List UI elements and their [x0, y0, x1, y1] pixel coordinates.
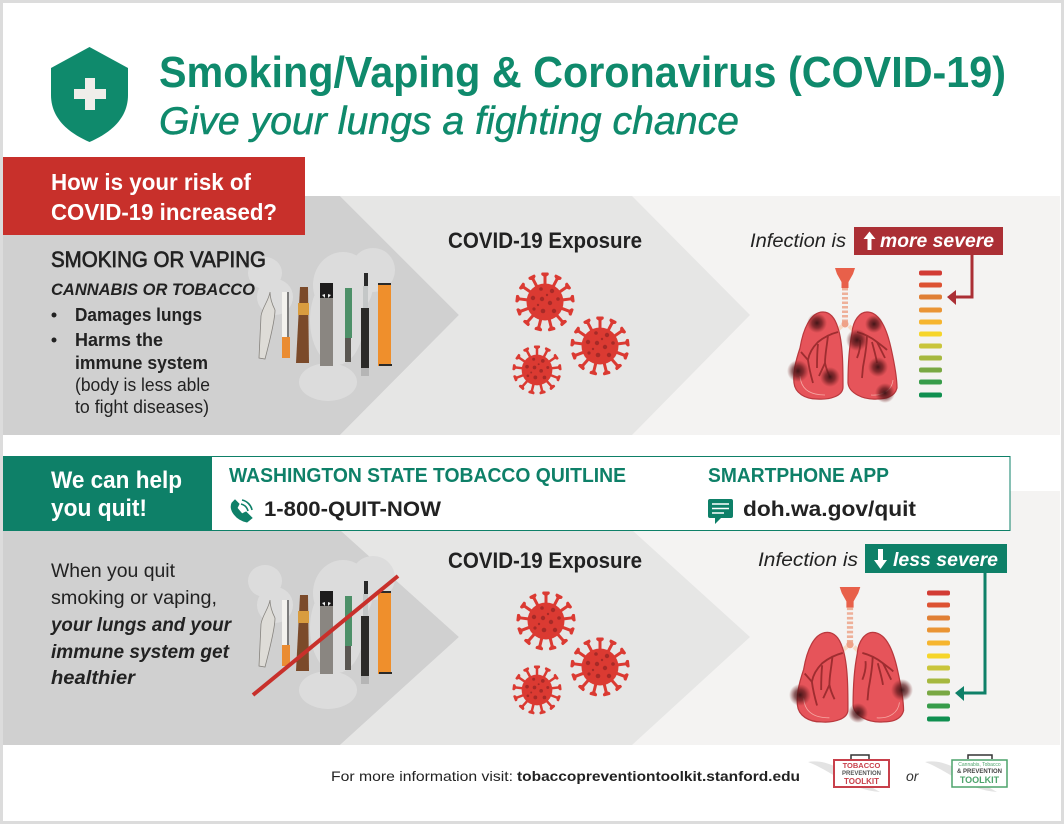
quit heading: you quit! — [51, 495, 147, 522]
exposure heading: COVID-19 Exposure — [448, 228, 642, 253]
risk heading: COVID-19 increased? — [51, 199, 277, 225]
icon: healthier lungs — [789, 587, 913, 723]
icon: damaged lungs — [787, 268, 897, 403]
app url: doh.wa.gov/quit — [743, 498, 916, 521]
icon: virus particles — [512, 592, 630, 715]
icon: chat bubble — [708, 499, 733, 524]
risk heading — [3, 157, 305, 235]
app heading: SMARTPHONE APP — [708, 465, 889, 487]
quit text block: smoking or vaping, — [51, 588, 217, 609]
severity scale — [919, 270, 942, 398]
or label: or — [906, 768, 920, 784]
infection label: less severe — [893, 550, 998, 571]
icon: phone — [231, 500, 252, 522]
smoking text block: Damages lungs — [75, 305, 202, 325]
logo: tobacco prevention toolkit — [808, 755, 889, 792]
band background — [600, 491, 1060, 745]
logo: cannabis and tobacco prevention toolkit: TOOLKIT — [960, 775, 1000, 785]
quit heading — [3, 456, 212, 531]
infection label — [750, 227, 1003, 255]
quit text block: When you quit — [51, 561, 176, 582]
quit arrow — [3, 530, 459, 745]
logo: tobacco prevention toolkit: TOBACCO — [843, 761, 881, 770]
logo: cannabis and tobacco prevention toolkit: Cannabis, Tobacco — [958, 762, 1001, 768]
infection label: more severe — [880, 231, 994, 252]
smoking text block: to fight diseases) — [75, 397, 209, 417]
icon: crossed out products — [248, 556, 398, 709]
quit text block — [50, 561, 233, 689]
quitline heading: WASHINGTON STATE TOBACCO QUITLINE — [229, 465, 626, 487]
logo: cannabis and tobacco prevention toolkit — [925, 755, 1007, 792]
risk heading: How is your risk of — [51, 169, 251, 195]
header — [51, 47, 1006, 143]
quitline number: 1-800-QUIT-NOW — [264, 498, 441, 521]
infection label — [758, 544, 1007, 573]
smoking arrow — [3, 196, 459, 435]
severity scale — [927, 590, 950, 722]
title: Smoking/Vaping & Coronavirus (COVID-19) — [159, 48, 1006, 97]
smoking text block — [51, 247, 266, 417]
logo: tobacco prevention toolkit: TOOLKIT — [844, 777, 879, 786]
icon: virus particles — [512, 272, 630, 395]
quit text block: your lungs and your — [50, 615, 233, 636]
smoking text block: CANNABIS OR TOBACCO — [51, 280, 255, 299]
logo: tobacco prevention toolkit: PREVENTION — [842, 771, 881, 777]
quit heading: We can help — [51, 467, 182, 494]
smoking text block: (body is less able — [75, 375, 210, 395]
smoking text block: SMOKING OR VAPING — [51, 247, 266, 272]
infection label: Infection is — [758, 550, 859, 571]
band background — [600, 196, 1060, 435]
panel: quit help bar — [3, 456, 1010, 531]
panel: after quitting — [3, 491, 1060, 745]
arrow to severity level — [955, 573, 985, 701]
exposure arrow — [340, 196, 750, 435]
infection label: Infection is — [750, 231, 847, 252]
quit text block: immune system get — [51, 642, 230, 663]
quit text block: healthier — [51, 668, 137, 689]
subtitle: Give your lungs a fighting chance — [159, 100, 739, 143]
exposure heading: COVID-19 Exposure — [448, 548, 642, 573]
footer — [331, 755, 1007, 792]
icon: shield with plus — [51, 47, 128, 142]
logo: cannabis and tobacco prevention toolkit: & PREVENTION — [957, 769, 1002, 775]
footer text: For more information visit: — [331, 768, 513, 784]
panel: risk increased — [3, 157, 1060, 435]
exposure arrow — [340, 530, 750, 745]
icon: smoking and vaping products — [248, 248, 395, 401]
smoking text block: Harms the — [75, 330, 163, 350]
smoking text block: immune system — [75, 353, 208, 373]
footer: tobaccopreventiontoolkit.stanford.edu — [517, 768, 800, 784]
arrow to severity level — [947, 255, 972, 305]
